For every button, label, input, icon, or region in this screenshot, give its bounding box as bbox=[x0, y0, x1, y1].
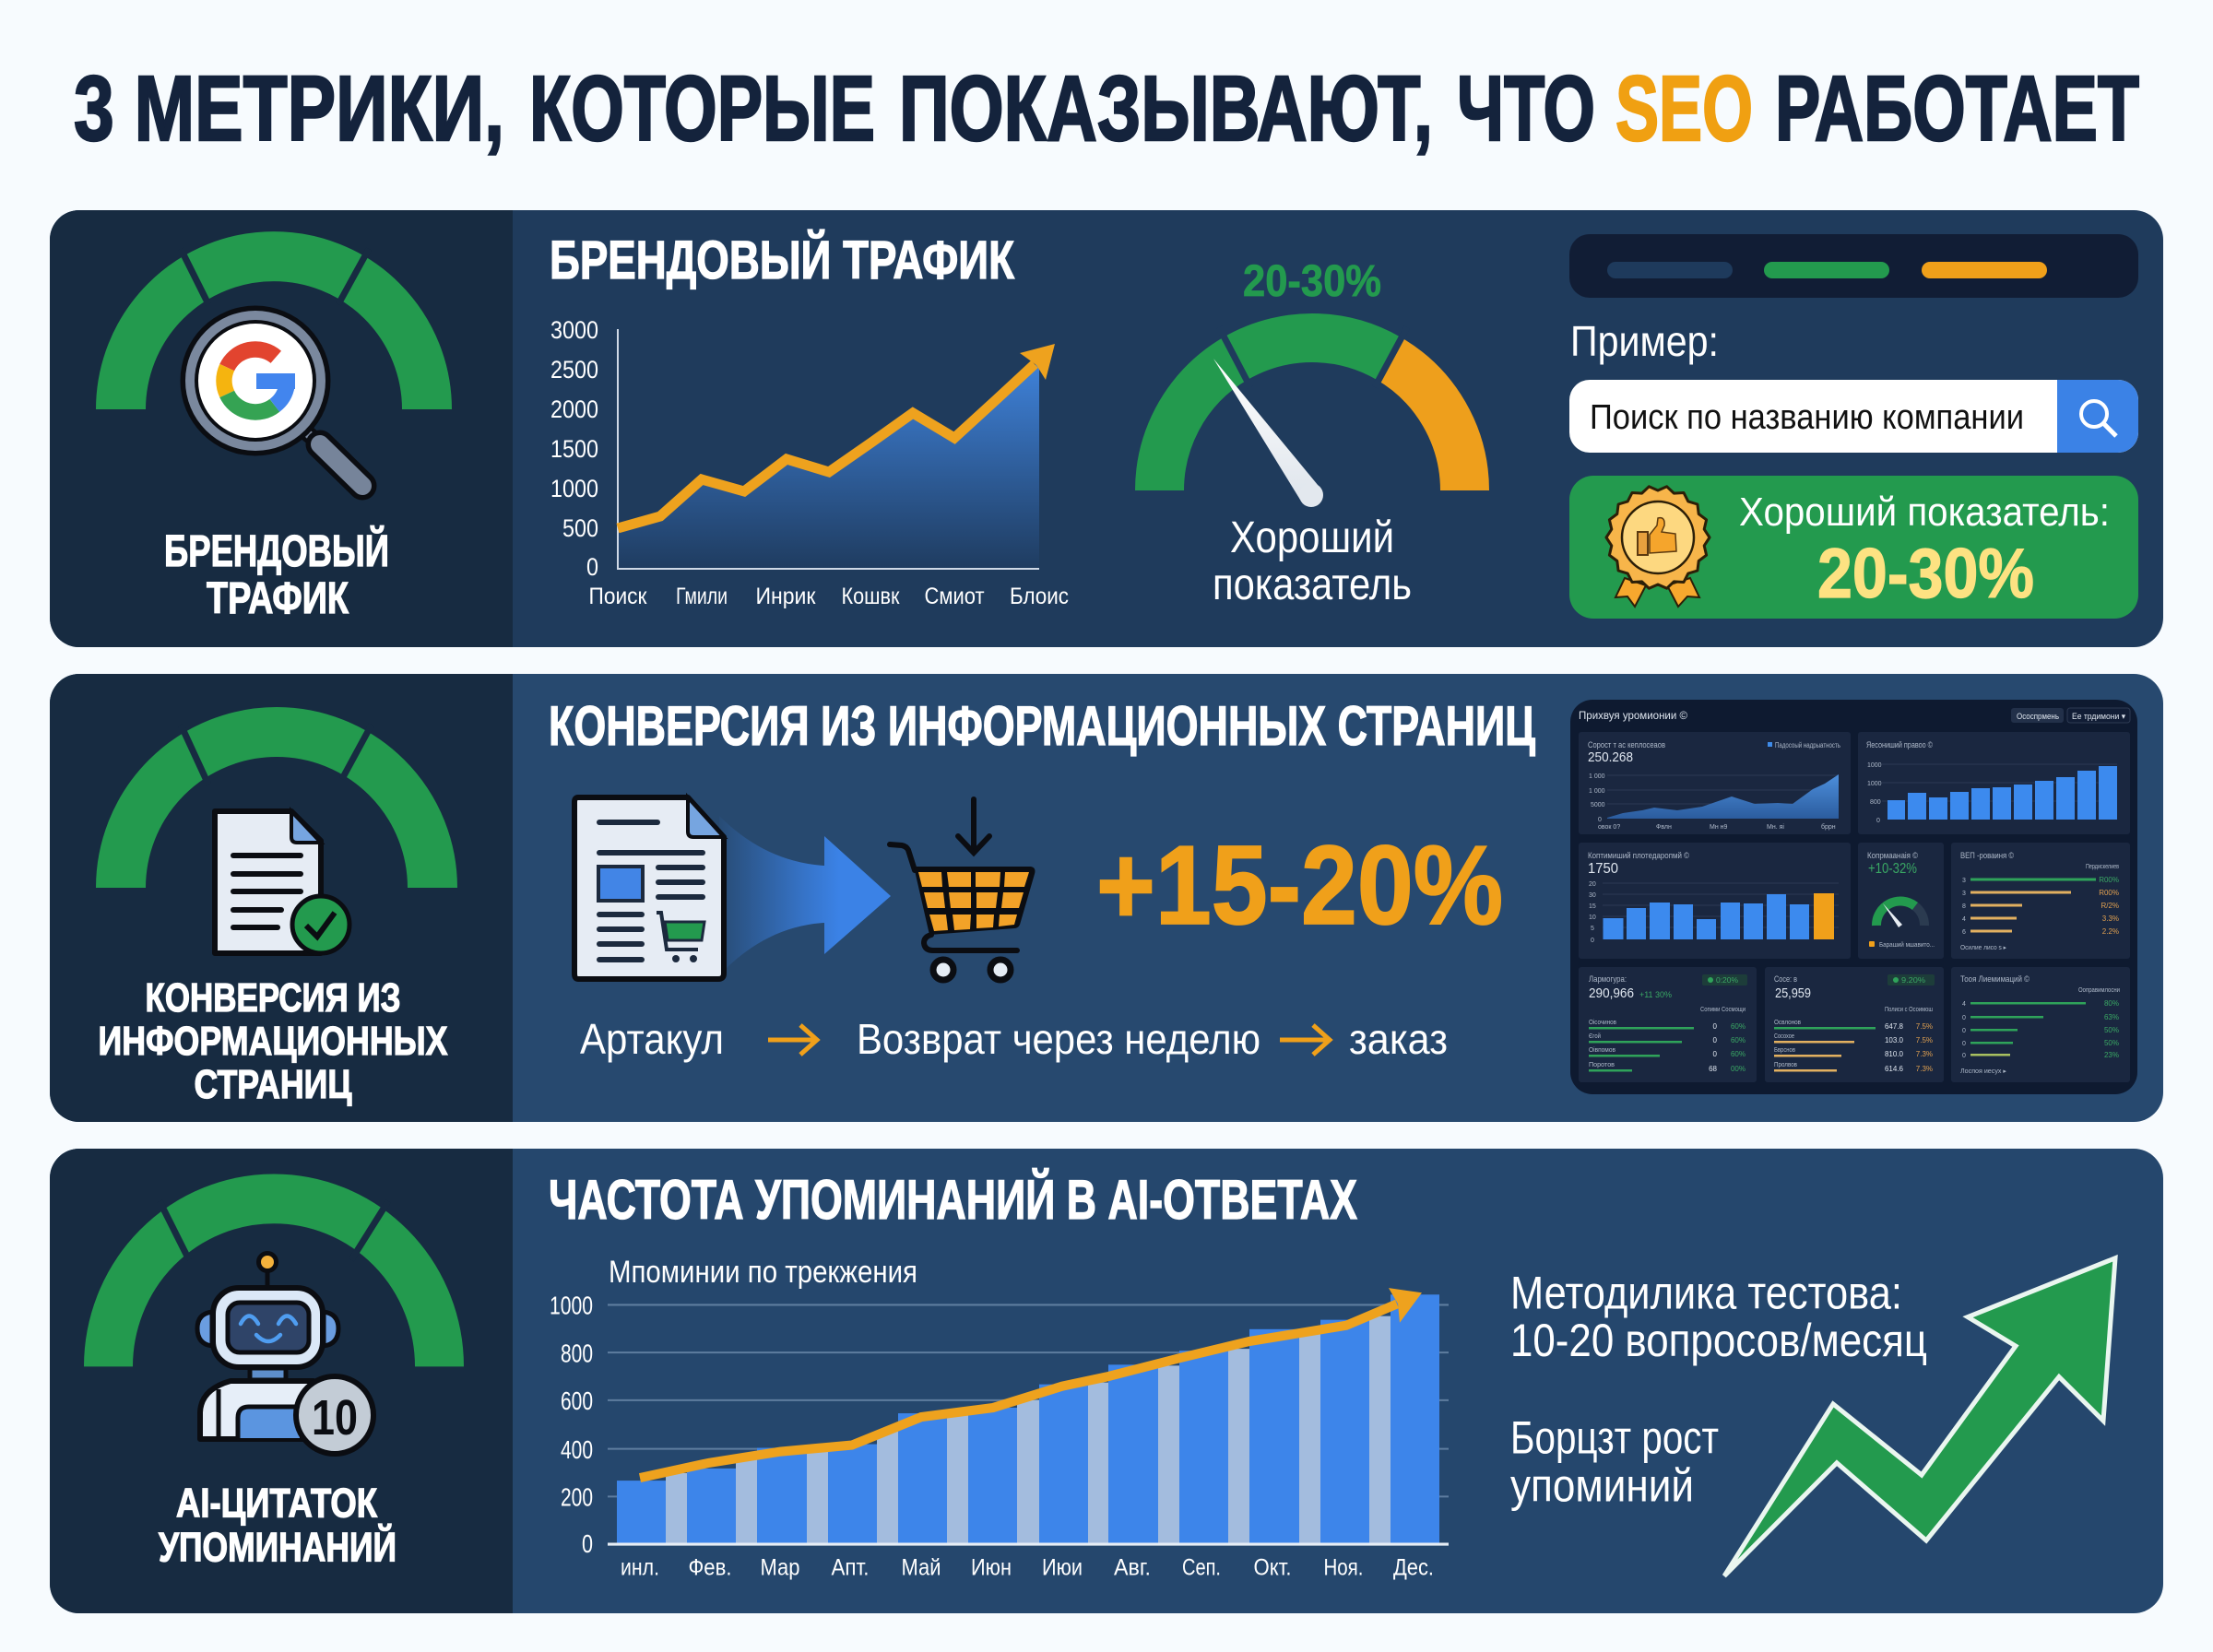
icon: shopping cart bbox=[890, 799, 1035, 980]
side label: conversion: КОНВЕРСИЯ ИЗ bbox=[146, 975, 400, 1021]
text: growth of mentions: Борцзт рост bbox=[1510, 1412, 1719, 1464]
dashboard card: area chart: Мн. яі bbox=[1767, 823, 1784, 831]
dashboard card: metrics middle: 647.8 bbox=[1885, 1022, 1904, 1031]
panel: branded traffic bbox=[50, 210, 2163, 647]
bar chart: mentions by month: Мпоминии по трекжения bbox=[609, 1255, 917, 1290]
dashboard card: metrics middle: Сосохое bbox=[1774, 1033, 1794, 1040]
dashboard card: metrics left: 00% bbox=[1731, 1065, 1746, 1073]
dashboard card: metrics left bbox=[1579, 967, 1757, 1082]
dashboard card: area chart: 250.268 bbox=[1588, 749, 1633, 765]
gauge: branded traffic side bbox=[121, 249, 427, 409]
search box: Поиск по названию компании bbox=[1590, 398, 2024, 437]
side label: conversion: ИНФОРМАЦИОННЫХ bbox=[98, 1019, 448, 1064]
bar chart: mentions by month: Дес. bbox=[1393, 1554, 1434, 1581]
bar chart: mentions by month: 0 bbox=[582, 1529, 593, 1558]
dashboard card: area chart: 1 000 bbox=[1589, 788, 1605, 795]
flow caption with arrows: заказ bbox=[1349, 1015, 1448, 1063]
dashboard card: metrics middle: Сосе: в bbox=[1774, 974, 1797, 984]
gauge: 20-30% good value: показатель bbox=[1213, 560, 1412, 609]
text: testing method: Методилика тестова: bbox=[1510, 1268, 1902, 1319]
dashboard card: bar chart: Яесониший правоо © bbox=[1866, 740, 1933, 749]
dashboard card: top mentions: 23% bbox=[2104, 1051, 2119, 1059]
text: growth of mentions bbox=[1510, 1412, 1719, 1511]
dashboard card: metrics left: 0 bbox=[1713, 1036, 1718, 1044]
example label: Пример: bbox=[1570, 317, 1719, 365]
dashboard card: SEO rows: 3.3% bbox=[2102, 914, 2119, 923]
dashboard card: top mentions: 80% bbox=[2104, 999, 2119, 1008]
dashboard card: metrics left: 60% bbox=[1731, 1050, 1746, 1058]
title: ЧТО bbox=[1457, 57, 1595, 160]
bar chart: mentions by month: Окт. bbox=[1254, 1554, 1291, 1581]
dashboard card: area chart: овок 0? bbox=[1598, 824, 1620, 831]
dashboard card: top mentions bbox=[1951, 967, 2130, 1082]
bar chart: mentions by month: Авг. bbox=[1114, 1554, 1151, 1581]
side label: branded traffic bbox=[164, 525, 389, 623]
dashboard card: metrics left: +11 30% bbox=[1639, 990, 1672, 999]
arrow: green growth bbox=[1724, 1258, 2115, 1576]
dashboard card: top mentions: 50% bbox=[2104, 1039, 2119, 1047]
dashboard card: top mentions: Тооя Лиемимаций © bbox=[1960, 974, 2030, 984]
big value: +15-20%: +15-20% bbox=[1096, 822, 1503, 948]
side label: AI: УПОМИНАНИЙ bbox=[159, 1523, 396, 1570]
dashboard card: bar chart: 0 bbox=[1876, 818, 1880, 824]
side label: branded traffic: БРЕНДОВЫЙ bbox=[164, 525, 389, 576]
text: growth of mentions: упоминий bbox=[1510, 1460, 1694, 1511]
dashboard card: area chart: Падосоый надрыатность bbox=[1775, 741, 1840, 749]
search box bbox=[1569, 380, 2138, 453]
area chart: branded traffic: Инрик bbox=[756, 584, 816, 609]
dashboard card: metrics middle: Пролвов bbox=[1774, 1062, 1797, 1068]
bar chart: mentions by month: 400 bbox=[561, 1435, 593, 1464]
area chart: branded traffic: 1500 bbox=[550, 435, 598, 463]
dashboard card: SEO rows: 4 bbox=[1962, 916, 1966, 923]
dashboard card: area chart: 5000 bbox=[1591, 802, 1605, 808]
dashboard card: metrics left: Оісочинов bbox=[1589, 1019, 1616, 1026]
dashboard card: SEO rows bbox=[1951, 843, 2130, 959]
dashboard card: bar chart: 1000 bbox=[1867, 762, 1882, 769]
dashboard card: metrics middle: 614.6 bbox=[1885, 1065, 1904, 1073]
dashboard card: SEO rows: 6 bbox=[1962, 929, 1966, 936]
icon: magnifier with Google G bbox=[181, 306, 362, 486]
side label: conversion bbox=[98, 975, 448, 1107]
dashboard screenshot: Прихвуя уромионии © bbox=[1579, 709, 1687, 722]
bar chart: mentions by month: Июи bbox=[1042, 1554, 1083, 1581]
dashboard card: metrics left: 0 bbox=[1713, 1022, 1718, 1031]
flow caption with arrows: Возврат через неделю bbox=[857, 1015, 1260, 1063]
dashboard card: area chart: Фвлн bbox=[1656, 824, 1672, 831]
dashboard card: SEO rows: Осилие лисо s ▸ bbox=[1960, 945, 2006, 951]
text: testing method bbox=[1510, 1268, 1927, 1366]
good value callout: Хороший показатель: bbox=[1739, 490, 2110, 535]
dashboard card: metrics left: Поротов bbox=[1589, 1062, 1615, 1068]
dashboard card: bar chart: 800 bbox=[1870, 799, 1881, 806]
dashboard card: top mentions: Ооправимлосни bbox=[2078, 987, 2120, 994]
heading: branded traffic: БРЕНДОВЫЙ ТРАФИК bbox=[550, 230, 1014, 290]
bar chart: mentions by month bbox=[550, 1255, 1449, 1581]
dashboard card: bars with highlight: Коптимиший плотедаропмй © bbox=[1588, 851, 1689, 860]
dashboard card: metrics left: 68 bbox=[1709, 1065, 1718, 1073]
area chart: branded traffic bbox=[550, 316, 1069, 609]
dashboard card: metrics left: 290,966 bbox=[1589, 985, 1634, 1001]
dashboard card: metrics left: Сопими Сосмощи bbox=[1700, 1007, 1746, 1013]
bar chart: mentions by month: 200 bbox=[561, 1482, 593, 1512]
dashboard card: metrics left: Єгой bbox=[1589, 1032, 1601, 1040]
dashboard card: metrics middle: 25,959 bbox=[1775, 985, 1811, 1001]
dashboard card: SEO rows: 8 bbox=[1962, 903, 1966, 910]
dashboard card: metrics middle: 7.5% bbox=[1916, 1022, 1933, 1031]
dashboard card: bars with highlight: 15 bbox=[1589, 903, 1596, 910]
dashboard card: metrics left: 0:20% bbox=[1716, 976, 1738, 985]
dashboard card: metrics middle: Бврснов bbox=[1774, 1047, 1795, 1054]
dashboard card: metrics left: 60% bbox=[1731, 1036, 1746, 1044]
arrow: article to cart bbox=[719, 816, 891, 975]
dashboard card: metrics left: 60% bbox=[1731, 1022, 1746, 1031]
title: КОТОРЫЕ bbox=[529, 57, 875, 160]
side label: conversion: СТРАНИЦ bbox=[194, 1062, 352, 1107]
dashboard card: bars with highlight: 20 bbox=[1589, 881, 1596, 888]
dashboard card: metrics middle: Освлонов bbox=[1774, 1020, 1801, 1026]
dashboard card: metrics left: Оівпомов bbox=[1589, 1046, 1615, 1054]
dashboard card: metrics middle: 7.3% bbox=[1916, 1065, 1933, 1073]
dashboard card: bars with highlight: 30 bbox=[1589, 892, 1596, 899]
dashboard card: bars with highlight: 0 bbox=[1591, 938, 1594, 944]
dashboard card: top mentions: 0 bbox=[1962, 1053, 1966, 1059]
dashboard card: bars with highlight: 5 bbox=[1591, 926, 1594, 932]
dashboard card: bars with highlight: 1750 bbox=[1588, 861, 1618, 877]
dashboard card: SEO rows: 2.2% bbox=[2102, 927, 2119, 936]
heading: conversion: КОНВЕРСИЯ ИЗ ИНФОРМАЦИОННЫХ СТРАНИЦ bbox=[549, 695, 1535, 757]
dashboard card: mini gauge: +10-32% bbox=[1868, 861, 1917, 877]
bar chart: mentions by month: Сеп. bbox=[1182, 1554, 1221, 1581]
good value callout bbox=[1569, 476, 2138, 619]
dashboard card: SEO rows: 3 bbox=[1962, 891, 1966, 897]
dashboard card: metrics middle: 9.20% bbox=[1901, 976, 1925, 985]
dashboard card: mini gauge bbox=[1858, 843, 1944, 959]
area chart: branded traffic: 0 bbox=[586, 553, 598, 581]
icon: robot with badge 10 bbox=[197, 1254, 373, 1454]
dashboard card: bars with highlight: 10 bbox=[1589, 914, 1596, 921]
dashboard card: metrics left: Лармогура: bbox=[1589, 974, 1627, 984]
flow caption with arrows: Артакул bbox=[580, 1015, 724, 1063]
dashboard card: area chart: 1 000 bbox=[1589, 773, 1605, 780]
bar chart: mentions by month: Мар bbox=[761, 1554, 800, 1581]
bar chart: mentions by month: Ноя. bbox=[1324, 1554, 1363, 1581]
dashboard card: SEO rows: Пердискелиев bbox=[2086, 864, 2119, 870]
dashboard card: bar chart bbox=[1858, 732, 2130, 834]
gauge: 20-30% good value bbox=[1160, 257, 1464, 609]
bar chart: mentions by month: Апт. bbox=[832, 1554, 869, 1581]
text: testing method: 10-20 вопросов/месяц bbox=[1510, 1316, 1927, 1366]
icon: document with check bbox=[215, 811, 349, 953]
dashboard screenshot: Ее трдимони ▾ bbox=[2072, 712, 2125, 721]
dashboard card: area chart bbox=[1579, 732, 1851, 834]
gauge: AI side bbox=[109, 1198, 439, 1366]
bar chart: mentions by month: 600 bbox=[561, 1386, 593, 1415]
dashboard card: mini gauge: Копрмаанаія © bbox=[1867, 851, 1918, 860]
dashboard card: metrics left: 0 bbox=[1713, 1050, 1718, 1058]
dashboard card: top mentions: Лоспоя иесух ▸ bbox=[1960, 1068, 2006, 1075]
dashboard card: top mentions: 0 bbox=[1962, 1028, 1966, 1034]
gauge: conversion side bbox=[121, 725, 432, 888]
flow caption with arrows bbox=[580, 1015, 1448, 1063]
dashboard card: top mentions: 0 bbox=[1962, 1041, 1966, 1047]
area chart: branded traffic: Гмили bbox=[676, 584, 728, 609]
icon: article page bbox=[574, 797, 724, 979]
dashboard card: area chart: Мн н9 bbox=[1710, 824, 1728, 831]
side label: branded traffic: ТРАФИК bbox=[207, 574, 349, 623]
panel: mentions in AI answers bbox=[50, 1149, 2163, 1613]
panel: conversion from informational pages bbox=[50, 674, 2163, 1122]
title: SEO bbox=[1615, 57, 1753, 160]
area chart: branded traffic: 2000 bbox=[550, 395, 598, 423]
dashboard card: metrics middle: 7.5% bbox=[1916, 1036, 1933, 1044]
dashboard card: metrics middle: 7.3% bbox=[1916, 1050, 1933, 1058]
heading: AI mentions: ЧАСТОТА УПОМИНАНИЙ В AI-ОТВЕТАХ bbox=[549, 1169, 1357, 1231]
icon: award badge with thumb bbox=[1606, 487, 1710, 607]
dashboard screenshot bbox=[1570, 700, 2137, 1094]
area chart: branded traffic: 2500 bbox=[550, 356, 598, 384]
area chart: branded traffic: Смиот bbox=[924, 584, 985, 609]
area chart: branded traffic: 500 bbox=[562, 514, 598, 542]
title: 3 МЕТРИКИ, bbox=[74, 57, 504, 160]
side label: AI bbox=[159, 1481, 396, 1570]
area chart: branded traffic: 3000 bbox=[550, 316, 598, 344]
dashboard card: SEO rows: R00% bbox=[2099, 889, 2119, 897]
dashboard card: mini gauge: Бараший мшавито... bbox=[1879, 941, 1935, 949]
dashboard card: area chart: бррн bbox=[1821, 823, 1836, 831]
bar chart: mentions by month: 1000 bbox=[550, 1291, 593, 1320]
status bar with pills bbox=[1569, 234, 2138, 298]
gauge: 20-30% good value: Хороший bbox=[1230, 513, 1394, 562]
dashboard card: top mentions: 0 bbox=[1962, 1015, 1966, 1021]
dashboard card: metrics middle: Полиси с Осоимош bbox=[1885, 1007, 1933, 1013]
area chart: branded traffic: Блоис bbox=[1010, 584, 1069, 609]
dashboard card: top mentions: 50% bbox=[2104, 1026, 2119, 1034]
dashboard card: metrics middle: 103.0 bbox=[1885, 1036, 1904, 1044]
dashboard card: top mentions: 63% bbox=[2104, 1013, 2119, 1021]
bar chart: mentions by month: 800 bbox=[561, 1339, 593, 1367]
area chart: branded traffic: Поиск bbox=[588, 584, 647, 609]
icon: robot with badge 10: 10 bbox=[312, 1390, 358, 1446]
side label: AI: AI-ЦИТАТОК bbox=[176, 1481, 378, 1527]
bar chart: mentions by month: инл. bbox=[621, 1554, 659, 1581]
bar chart: mentions by month: Фев. bbox=[688, 1554, 732, 1581]
dashboard card: top mentions: 4 bbox=[1962, 1001, 1966, 1008]
dashboard card: SEO rows: ВЕП -роваиня © bbox=[1960, 851, 2014, 860]
gauge: 20-30% good value: 20-30% bbox=[1243, 257, 1381, 306]
good value callout: 20-30% bbox=[1817, 535, 2034, 613]
dashboard card: area chart: 0 bbox=[1598, 817, 1602, 823]
dashboard card: SEO rows: 3 bbox=[1962, 878, 1966, 884]
title: ПОКАЗЫВАЮТ, bbox=[899, 57, 1433, 160]
title bbox=[74, 57, 2139, 160]
bar chart: mentions by month: Июн bbox=[971, 1554, 1012, 1581]
area chart: branded traffic: 1000 bbox=[550, 475, 598, 502]
dashboard card: metrics middle: 810.0 bbox=[1885, 1050, 1904, 1058]
area chart: branded traffic: Кошвк bbox=[841, 584, 900, 609]
dashboard screenshot: Ососпрмень bbox=[2017, 712, 2059, 721]
dashboard card: SEO rows: R/2% bbox=[2101, 902, 2119, 910]
dashboard card: bars with highlight bbox=[1579, 843, 1851, 959]
bar chart: mentions by month: Май bbox=[902, 1554, 941, 1581]
dashboard card: area chart: Сорост т ас кеплосеаов bbox=[1588, 740, 1665, 749]
dashboard card: metrics middle bbox=[1765, 967, 1944, 1082]
dashboard card: SEO rows: R00% bbox=[2099, 876, 2119, 884]
dashboard card: bar chart: 1000 bbox=[1867, 781, 1882, 787]
